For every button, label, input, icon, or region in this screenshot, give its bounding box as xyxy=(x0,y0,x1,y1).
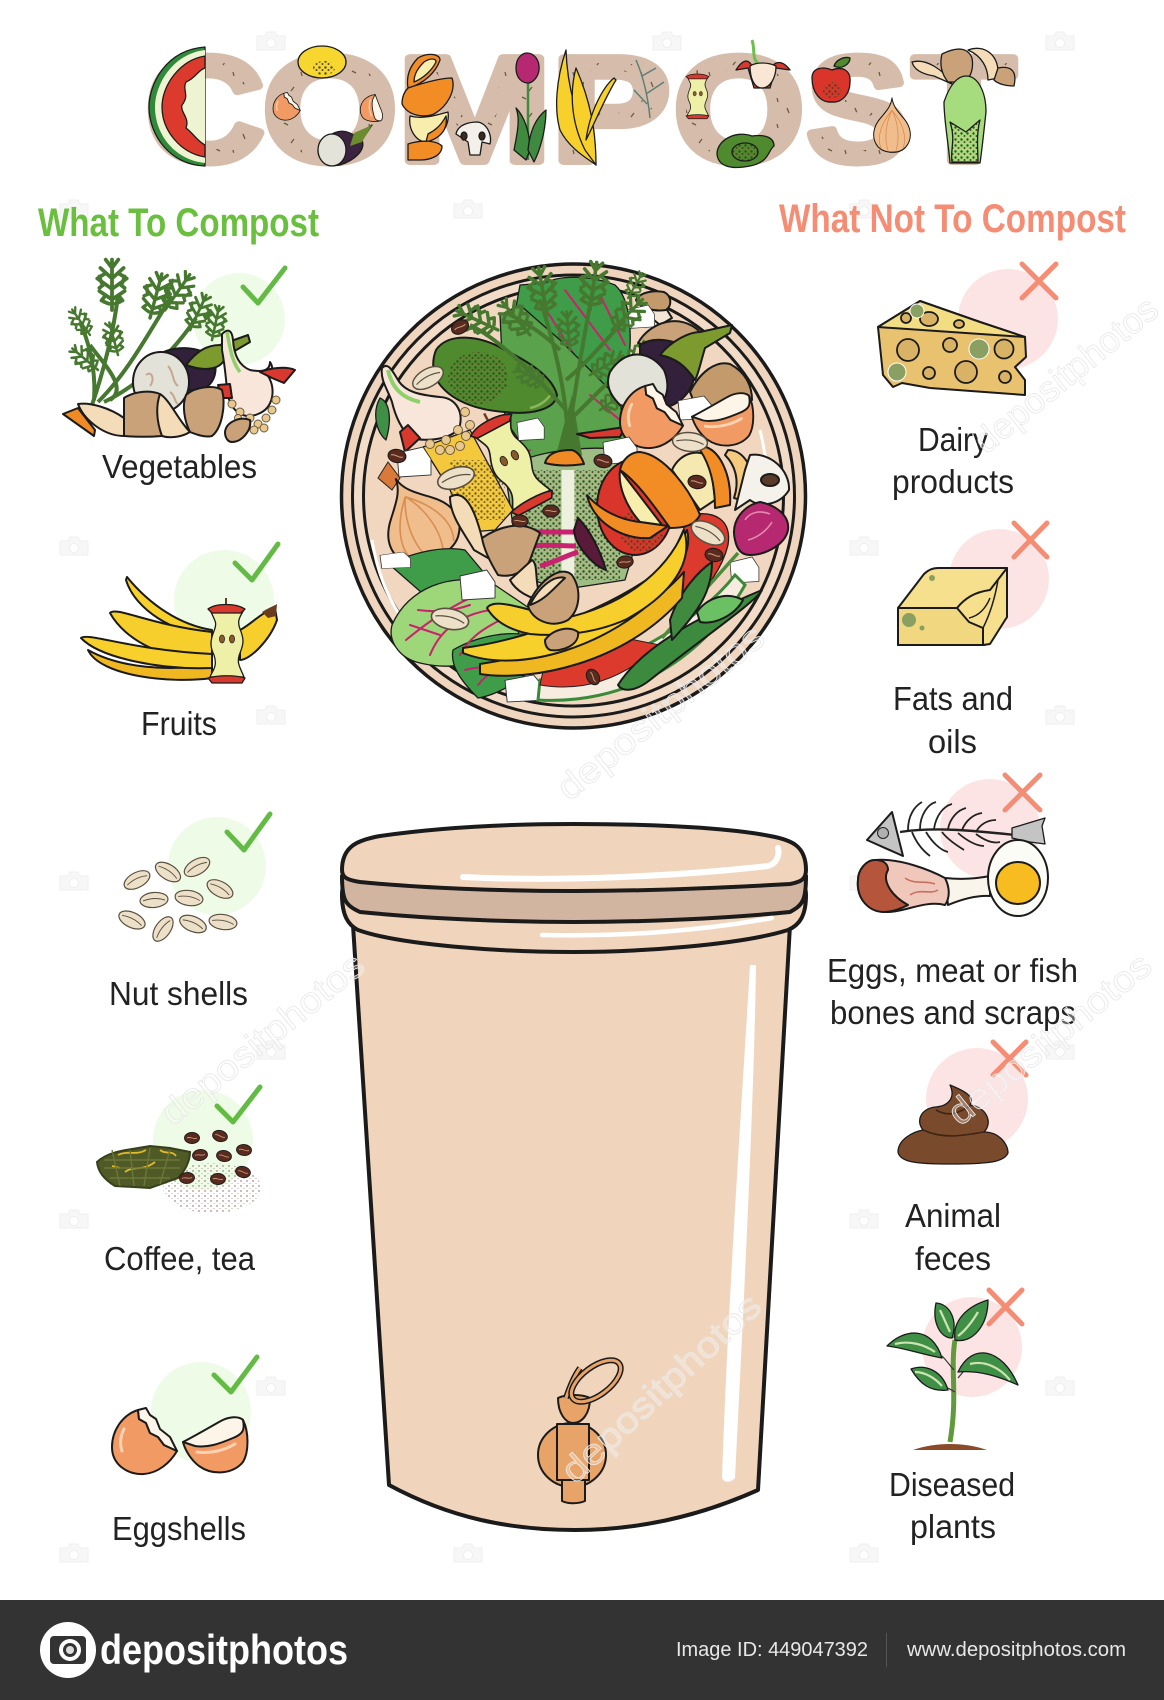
label second line: products xyxy=(892,463,1014,500)
lid top xyxy=(342,824,806,891)
check mark xyxy=(217,1087,260,1122)
green circle xyxy=(193,273,285,365)
cross mark xyxy=(1022,264,1056,298)
title letters: P xyxy=(552,28,670,192)
icon: carrot tops xyxy=(65,260,229,405)
item: animal feces xyxy=(898,1042,1028,1277)
onion xyxy=(363,462,470,575)
pink circle xyxy=(922,1297,1022,1397)
icon: boiled egg xyxy=(988,840,1048,916)
chard leaf top xyxy=(510,277,630,420)
carrot tops xyxy=(451,261,665,466)
cross mark xyxy=(993,1042,1026,1075)
paper scraps xyxy=(380,418,759,702)
paper scrap xyxy=(628,305,655,328)
watermark text: depositphotos xyxy=(548,616,772,808)
bin body xyxy=(353,925,790,1530)
red apple xyxy=(597,459,673,555)
title letters: T xyxy=(913,28,1015,192)
mushroom top xyxy=(636,291,672,325)
title art: onion xyxy=(874,98,910,152)
logo wordmark: depositphotos xyxy=(100,1626,348,1673)
watermark text: depositphotos xyxy=(552,1285,769,1491)
title art: cauliflower xyxy=(736,40,790,88)
plum slice xyxy=(574,518,606,570)
bin body highlight xyxy=(722,965,756,1482)
title art: banana peel xyxy=(557,50,616,165)
potato right xyxy=(690,363,752,410)
label: Nut shells xyxy=(109,975,248,1012)
item: fruits xyxy=(81,544,278,742)
green leaves and stems xyxy=(618,562,762,690)
eggplant xyxy=(608,325,732,412)
peas xyxy=(426,408,474,454)
label: Vegetables xyxy=(102,448,257,485)
bananas xyxy=(463,530,688,676)
watermark text: depositphotos xyxy=(939,944,1159,1133)
check mark xyxy=(214,1357,257,1392)
label second line: oils xyxy=(928,723,977,760)
watermark text: depositphotos xyxy=(965,288,1164,461)
footer bar xyxy=(0,1600,1164,1700)
footer background xyxy=(0,1600,1164,1700)
title art: lemon xyxy=(298,46,346,78)
check mark xyxy=(243,268,285,303)
icon: eggplant xyxy=(133,335,250,412)
green circle xyxy=(153,1090,253,1190)
icon: coffee grounds xyxy=(163,1163,261,1213)
orange peel xyxy=(587,452,700,538)
title art: watermelon xyxy=(149,47,205,166)
title art: orange peel xyxy=(402,54,453,160)
label: Fats and xyxy=(893,680,1013,717)
label: Animal xyxy=(905,1197,1001,1234)
item: coffee, tea xyxy=(97,1087,261,1277)
item: eggs, meat or fish bones and scraps xyxy=(827,775,1078,1031)
title art: tulip xyxy=(514,53,546,162)
pink circle xyxy=(940,779,1040,879)
title art: eggshells xyxy=(273,92,385,123)
cauliflower and peas xyxy=(376,366,461,452)
check mark xyxy=(235,544,278,580)
title letters: O xyxy=(674,28,804,192)
lower lid band xyxy=(342,868,806,952)
green circle xyxy=(174,550,274,650)
title art: eggplant xyxy=(318,125,372,166)
mushroom right xyxy=(735,455,789,510)
item: vegetables xyxy=(63,260,295,485)
avocado xyxy=(433,338,557,413)
green circle xyxy=(168,817,266,915)
paper scrap xyxy=(678,396,712,420)
title letters: C xyxy=(146,28,264,192)
icon: butter xyxy=(898,568,1007,645)
item: eggshells xyxy=(112,1357,257,1547)
central chard stalk with mould xyxy=(505,448,640,590)
check mark xyxy=(227,814,270,850)
label second line: feces xyxy=(915,1240,991,1277)
cross mark xyxy=(1014,523,1047,557)
logo icon xyxy=(40,1622,96,1678)
divider xyxy=(886,1633,887,1667)
label: Coffee, tea xyxy=(104,1240,256,1277)
carrot top slice xyxy=(545,450,584,465)
icon: eggshell halves xyxy=(112,1408,248,1474)
title art: cabbage xyxy=(944,76,986,163)
label second line: bones and scraps xyxy=(830,994,1076,1031)
title letters: S xyxy=(807,28,908,192)
green circle xyxy=(151,1362,251,1462)
tap xyxy=(538,1352,628,1503)
title art: apple core xyxy=(686,70,709,119)
icon: bananas xyxy=(81,577,277,680)
title letters: M xyxy=(398,28,551,192)
icon: meat bone xyxy=(858,860,990,912)
title art: mushroom xyxy=(456,122,490,155)
lettuce behind xyxy=(500,305,625,470)
label: Fruits xyxy=(141,705,217,742)
pink circle xyxy=(958,269,1058,369)
title art: apple xyxy=(812,57,850,102)
apple core xyxy=(464,402,555,518)
pink circle xyxy=(949,529,1049,629)
title art: avocado xyxy=(717,134,774,168)
label: Eggshells xyxy=(112,1510,246,1547)
icon: nut shells xyxy=(116,854,238,945)
icon: tea pile xyxy=(97,1146,190,1188)
coffee beans xyxy=(387,317,724,687)
title letters: O xyxy=(263,28,397,192)
label: Diseased xyxy=(889,1466,1015,1503)
potato peel xyxy=(450,495,578,650)
icon: sick plant xyxy=(887,1300,1018,1450)
label: Dairy xyxy=(918,421,988,458)
icon: coffee beans xyxy=(179,1129,252,1184)
watermelon slice xyxy=(538,575,745,700)
eggshell halves xyxy=(620,384,753,448)
icon: apple core xyxy=(208,598,245,683)
red pepper piece xyxy=(577,427,625,438)
title art: dill xyxy=(634,60,664,118)
watermark text: depositphotos xyxy=(152,944,372,1133)
apple slice and curls xyxy=(672,447,753,510)
watermark cameras xyxy=(60,32,1074,1562)
label second line: plants xyxy=(910,1508,996,1545)
cross mark xyxy=(1005,775,1040,810)
icon: potato peel xyxy=(63,387,250,442)
title letters xyxy=(146,28,1015,192)
tulip with stem xyxy=(662,502,788,638)
plate of compost scraps xyxy=(342,261,806,728)
item: dairy products xyxy=(878,264,1058,500)
watermark text xyxy=(152,288,1164,1491)
compost bin xyxy=(342,824,806,1530)
title art: potato peel xyxy=(912,48,1015,86)
icon: fish skeleton xyxy=(867,802,1045,856)
pink circle xyxy=(926,1048,1028,1150)
title: COMPOST xyxy=(146,28,1015,192)
icon: mouldy cheese xyxy=(878,301,1026,395)
plate xyxy=(342,264,806,728)
yellow lemon peel patch xyxy=(423,430,513,532)
lettuce lower left xyxy=(390,549,545,698)
item: fats and oils xyxy=(893,523,1049,760)
website: www.depositphotos.com xyxy=(906,1639,1126,1661)
item: diseased plants xyxy=(887,1290,1022,1545)
potato top right xyxy=(638,321,708,350)
icon: cauliflower with peas xyxy=(218,331,295,434)
lid highlights xyxy=(463,848,779,935)
lid groove xyxy=(342,876,806,922)
image id: Image ID: 449047392 xyxy=(676,1639,868,1661)
nut shells xyxy=(409,362,729,633)
heading: what to compost: What To Compost xyxy=(38,201,319,245)
icon: feces pile xyxy=(898,1085,1008,1164)
item: nut shells xyxy=(109,814,270,1012)
label: Eggs, meat or fish xyxy=(827,952,1078,989)
watermelon behind orange xyxy=(665,514,729,605)
cross mark xyxy=(989,1290,1022,1324)
